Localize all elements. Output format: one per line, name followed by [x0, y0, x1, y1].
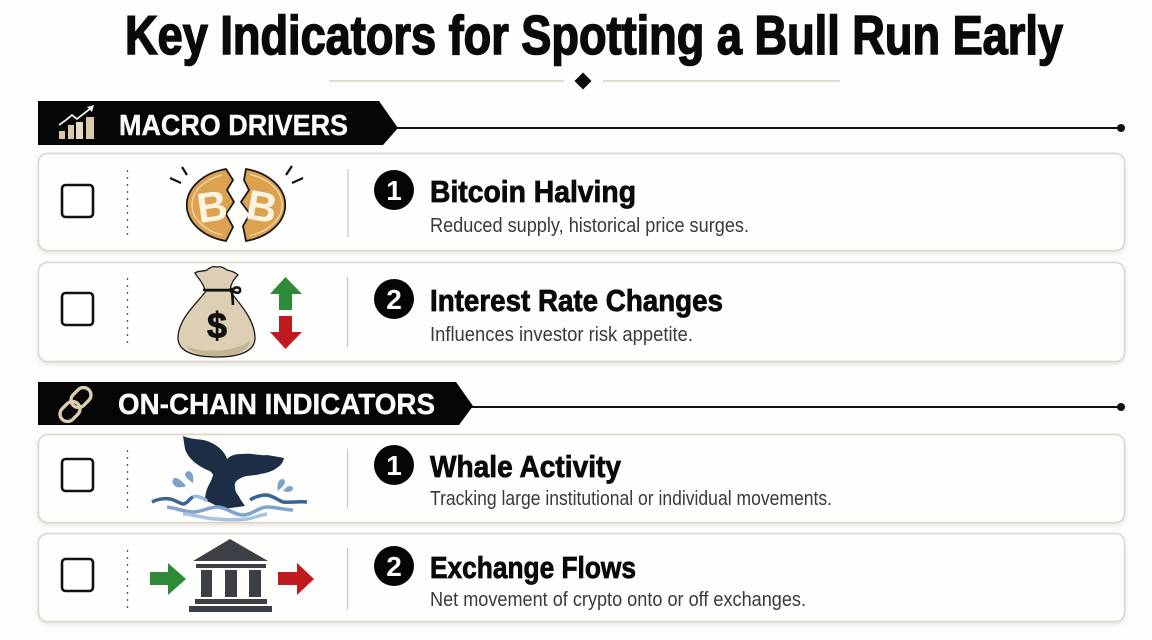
- icon: green up arrow: [270, 277, 302, 310]
- icon: rising bar chart: [59, 105, 94, 139]
- title divider with diamond: [329, 72, 840, 90]
- icon: broken bitcoin: [170, 166, 303, 241]
- section header: on-chain indicators: [38, 382, 1125, 425]
- heading: Exchange Flows: [430, 550, 636, 585]
- heading: Whale Activity: [430, 449, 622, 484]
- number badge: [374, 445, 414, 485]
- checkbox: [62, 293, 93, 325]
- checkbox: [62, 459, 93, 491]
- description: Influences investor risk appetite.: [430, 324, 693, 346]
- icon: green inflow arrow: [150, 563, 186, 595]
- icon: broken bitcoin: B: [194, 181, 230, 232]
- section header: macro drivers: MACRO DRIVERS: [119, 110, 348, 142]
- section header: on-chain indicators: ON-CHAIN INDICATORS: [118, 389, 435, 421]
- heading: Bitcoin Halving: [430, 174, 636, 209]
- icon: whale tail in water: [152, 436, 307, 520]
- number badge: [374, 546, 414, 586]
- number badge: [374, 279, 414, 319]
- panel: interest rate changes: [38, 262, 1124, 362]
- number badge: 1: [386, 450, 402, 481]
- icon: red down arrow: [270, 316, 302, 349]
- checkbox: [62, 185, 93, 217]
- panel: whale activity: [38, 434, 1124, 522]
- checkbox: [62, 559, 93, 591]
- number badge: [374, 170, 414, 210]
- section header: macro drivers: [38, 101, 1125, 145]
- icon: money bag: [178, 267, 255, 357]
- panel: exchange flows: [38, 534, 1124, 622]
- description: Net movement of crypto onto or off exchanges.: [430, 589, 806, 611]
- icon: money bag: $: [207, 305, 227, 346]
- description: Tracking large institutional or individual movements.: [430, 488, 832, 510]
- number badge: 2: [386, 551, 402, 582]
- icon: bank building: [189, 539, 272, 612]
- icon: red outflow arrow: [278, 563, 314, 595]
- heading: Interest Rate Changes: [430, 283, 723, 318]
- icon: chain link: [57, 384, 94, 425]
- number badge: 1: [386, 175, 402, 206]
- number badge: 2: [386, 284, 402, 315]
- icon: broken bitcoin: B: [243, 181, 281, 232]
- description: Reduced supply, historical price surges.: [430, 215, 749, 237]
- panel: bitcoin halving: [38, 154, 1124, 250]
